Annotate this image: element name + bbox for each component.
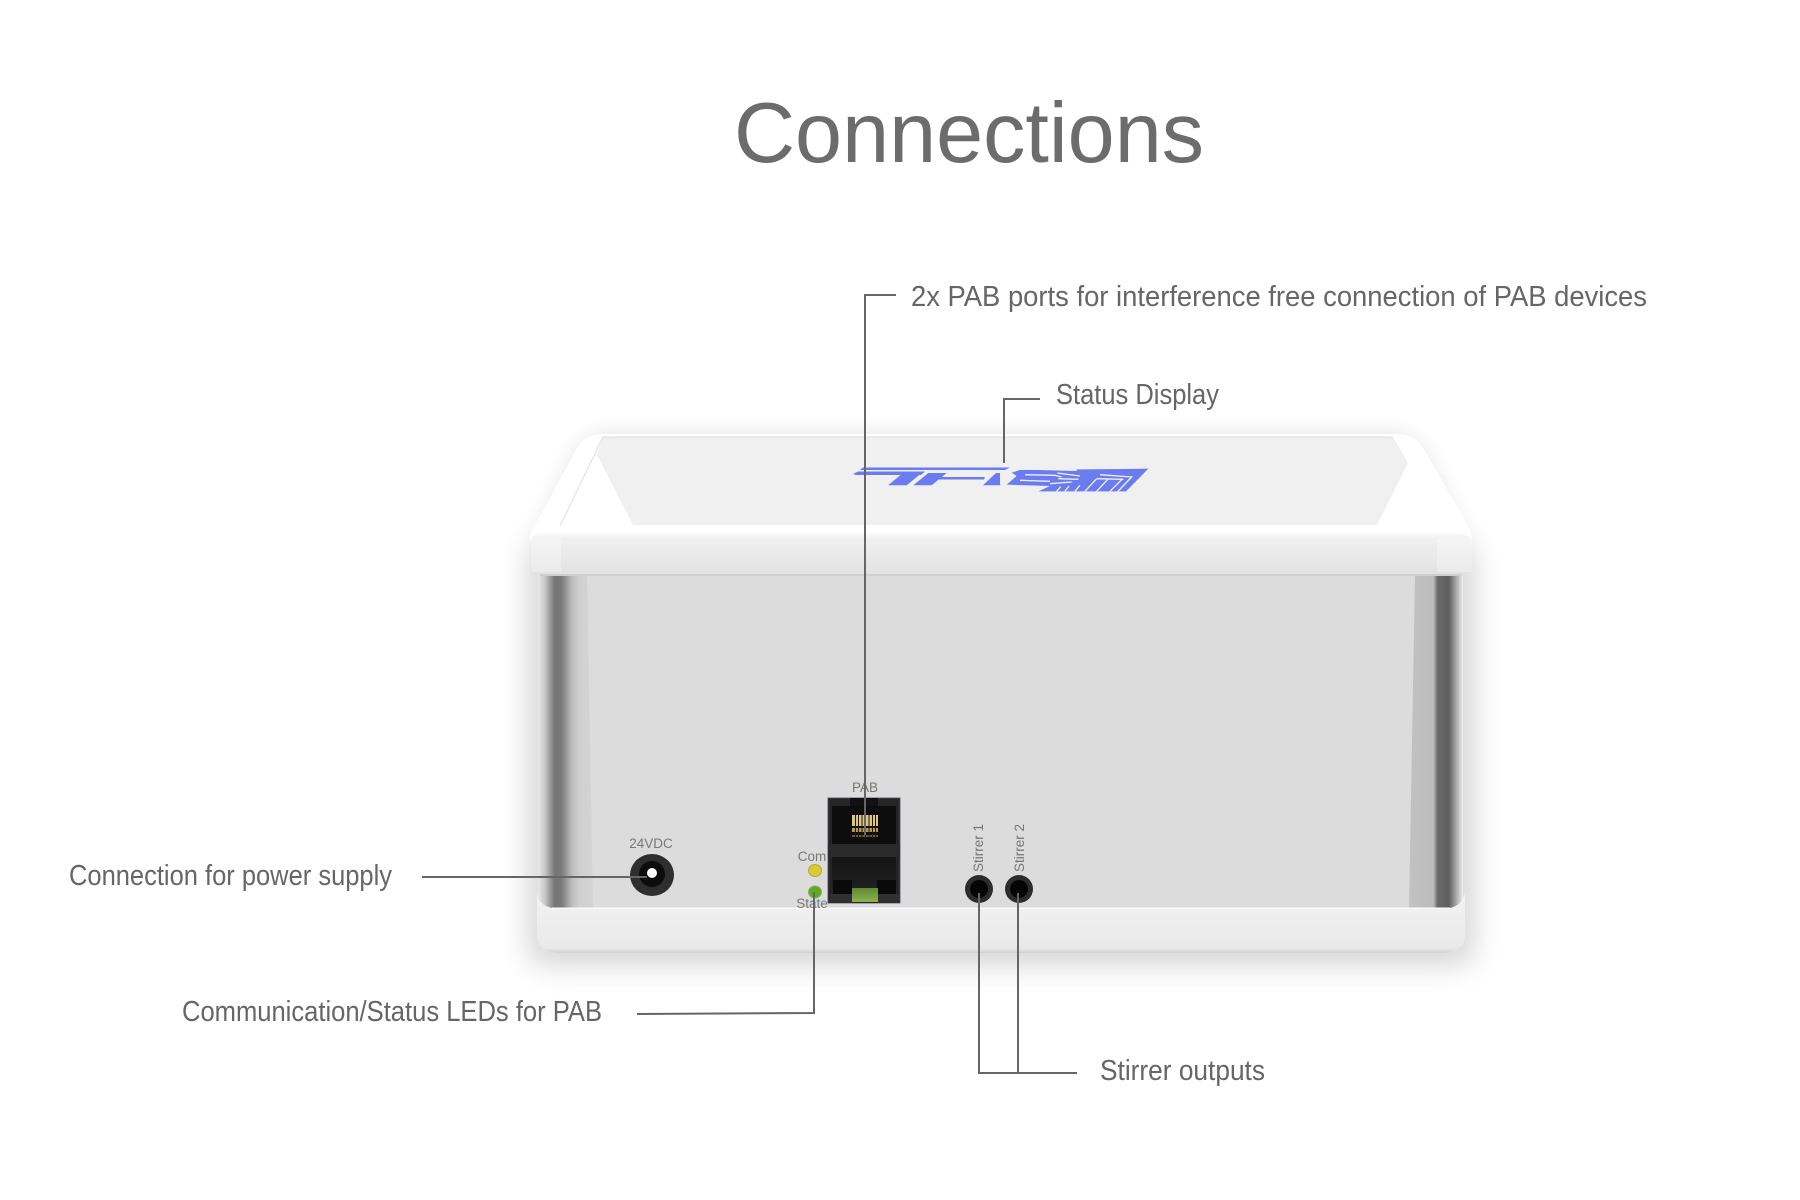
status display logo (853, 468, 1148, 492)
callout: LEDs (182, 892, 814, 1028)
body metal corner right (1408, 572, 1463, 910)
callout: status display (1004, 379, 1220, 463)
PAB port double RJ jack (828, 780, 900, 903)
callout: power supply: Connection for power supply (69, 860, 393, 892)
title: Connections (734, 86, 1204, 181)
lid front face (530, 533, 1472, 576)
lid top face (530, 434, 1472, 540)
LEDs Com and State: Com (798, 849, 826, 864)
device: controller box (528, 432, 1474, 965)
base (537, 892, 1465, 953)
stirrer socket 2: Stirrer 2 (1012, 824, 1027, 872)
callout: status display: Status Display (1056, 379, 1220, 411)
callout: stirrer outputs (979, 893, 1265, 1087)
stirrer socket 2 (1005, 824, 1033, 903)
LEDs Com and State (796, 849, 828, 911)
PAB port double RJ jack: PAB (852, 780, 878, 795)
stirrer socket 1 (965, 824, 993, 903)
LEDs Com and State: State (796, 896, 828, 911)
body front panel (587, 575, 1415, 908)
callout: PAB ports (865, 281, 1647, 835)
callout: LEDs: Communication/Status LEDs for PAB (182, 996, 602, 1028)
soft shadow (528, 432, 1474, 965)
power jack 24VDC: 24VDC (629, 836, 673, 851)
status display glass (560, 437, 1408, 526)
stirrer socket 1: Stirrer 1 (971, 824, 986, 872)
body metal corner left (538, 572, 594, 910)
callout: PAB ports: 2x PAB ports for interference free connection of PAB devices (911, 281, 1647, 313)
callout: stirrer outputs: Stirrer outputs (1100, 1055, 1265, 1087)
power jack 24VDC (629, 836, 674, 896)
